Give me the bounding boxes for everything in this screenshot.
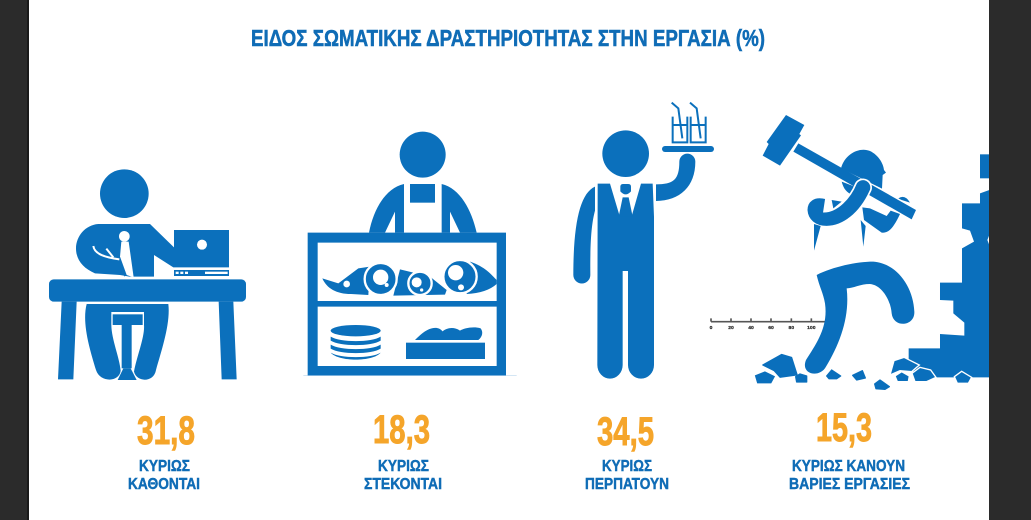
- scale axis: 20: [728, 325, 734, 331]
- label: heavy work: ΒΑΡΙΕΣ ΕΡΓΑΣΙΕΣ: [789, 476, 910, 493]
- icon: shopkeeper behind food counter: [303, 132, 517, 376]
- dark left margin: [0, 0, 29, 520]
- label: walking: [585, 458, 669, 493]
- wall: [980, 154, 989, 178]
- label: seated: ΚΑΘΟΝΤΑΙ: [128, 476, 200, 493]
- label: seated: ΚΥΡΙΩΣ: [139, 458, 190, 475]
- label: walking: ΚΥΡΙΩΣ: [602, 458, 652, 475]
- title: ΕΙΔΟΣ ΣΩΜΑΤΙΚΗΣ ΔΡΑΣΤΗΡΙΟΤΗΤΑΣ ΣΤΗΝ ΕΡΓΑΣΙΑ (%): [251, 25, 765, 51]
- label: standing: ΚΥΡΙΩΣ: [378, 458, 429, 475]
- label: walking: ΠΕΡΠΑΤΟΥΝ: [585, 476, 669, 493]
- scale axis: 80: [789, 325, 794, 331]
- label: standing: [364, 458, 442, 493]
- dark right margin: [989, 0, 1031, 520]
- icon: labourer with sledgehammer breaking a wall: [754, 115, 989, 389]
- value: seated: 31,8: [137, 409, 195, 453]
- rubble: [754, 354, 889, 389]
- scale axis: [710, 318, 825, 331]
- scale axis: 60: [768, 325, 774, 331]
- value: standing: 18,3: [373, 408, 430, 452]
- label: heavy work: ΚΥΡΙΩΣ ΚΑΝΟΥΝ: [792, 458, 905, 475]
- icon: waiter carrying tray with drinks: [573, 103, 714, 379]
- scale axis: 40: [748, 325, 754, 331]
- label: heavy work: [789, 458, 910, 493]
- scale axis: 100: [807, 325, 816, 331]
- scale axis: 0: [710, 325, 713, 331]
- icon: seated office worker at desk: [49, 169, 246, 380]
- label: seated: [128, 458, 200, 493]
- value: walking: 34,5: [597, 410, 654, 454]
- label: standing: ΣΤΕΚΟΝΤΑΙ: [364, 476, 442, 493]
- value: heavy work: 15,3: [816, 406, 872, 450]
